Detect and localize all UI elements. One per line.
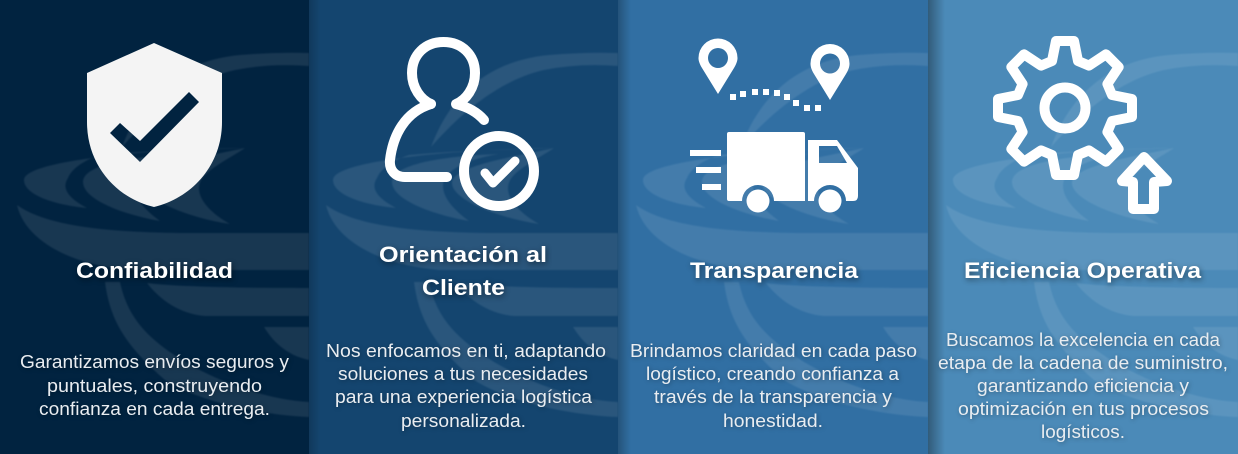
text block: Eficiencia description: logísticos.: [1041, 422, 1125, 442]
panel: Confiabilidad: [0, 0, 309, 454]
heading: Eficiencia Operativa: Eficiencia Operativa: [964, 258, 1202, 283]
text block: Eficiencia description: etapa de la cadena de suministro,: [938, 353, 1228, 373]
text block: Confiabilidad description: [20, 352, 289, 419]
text block: Orientación description: para una experiencia logística: [335, 387, 593, 407]
icon: gear with up arrow: [998, 41, 1167, 209]
text block: Orientación description: Nos enfocamos en ti, adaptando: [326, 341, 606, 361]
text block: Transparencia description: Brindamos claridad en cada paso: [630, 341, 917, 361]
heading: Orientación al Cliente: [379, 242, 547, 300]
text block: Orientación description: personalizada.: [401, 411, 526, 431]
heading: Transparencia: Transparencia: [690, 258, 859, 283]
text block: Confiabilidad description: puntuales, construyendo: [47, 376, 262, 396]
panel: Transparencia: [618, 0, 928, 454]
text block: Orientación description: soluciones a tus necesidades: [338, 364, 588, 384]
text block: Confiabilidad description: confianza en cada entrega.: [39, 399, 270, 419]
panel: Orientación al Cliente: [309, 0, 618, 454]
text block: Eficiencia description: [938, 330, 1228, 442]
icon: location pins and truck: [690, 38, 858, 212]
text block: Eficiencia description: garantizando eficiencia y: [977, 376, 1189, 396]
icon: person with check: [390, 42, 534, 206]
text block: Transparencia description: través de la transparencia y: [654, 387, 892, 407]
heading: Orientación al Cliente: Orientación al: [379, 242, 547, 267]
heading: Orientación al Cliente: Cliente: [422, 275, 505, 300]
text block: Eficiencia description: optimización en tus procesos: [958, 399, 1209, 419]
icon: shield with check: [87, 43, 222, 207]
text block: Transparencia description: honestidad.: [723, 411, 823, 431]
heading: Confiabilidad: Confiabilidad: [76, 258, 233, 283]
text block: Eficiencia description: Buscamos la excelencia en cada: [946, 330, 1221, 350]
panel: Eficiencia Operativa: [928, 0, 1238, 454]
text block: Transparencia description: logístico, creando confianza a: [646, 364, 900, 384]
text block: Confiabilidad description: Garantizamos envíos seguros y: [20, 352, 289, 372]
text block: Orientación description: [326, 341, 606, 431]
text block: Transparencia description: [630, 341, 917, 431]
